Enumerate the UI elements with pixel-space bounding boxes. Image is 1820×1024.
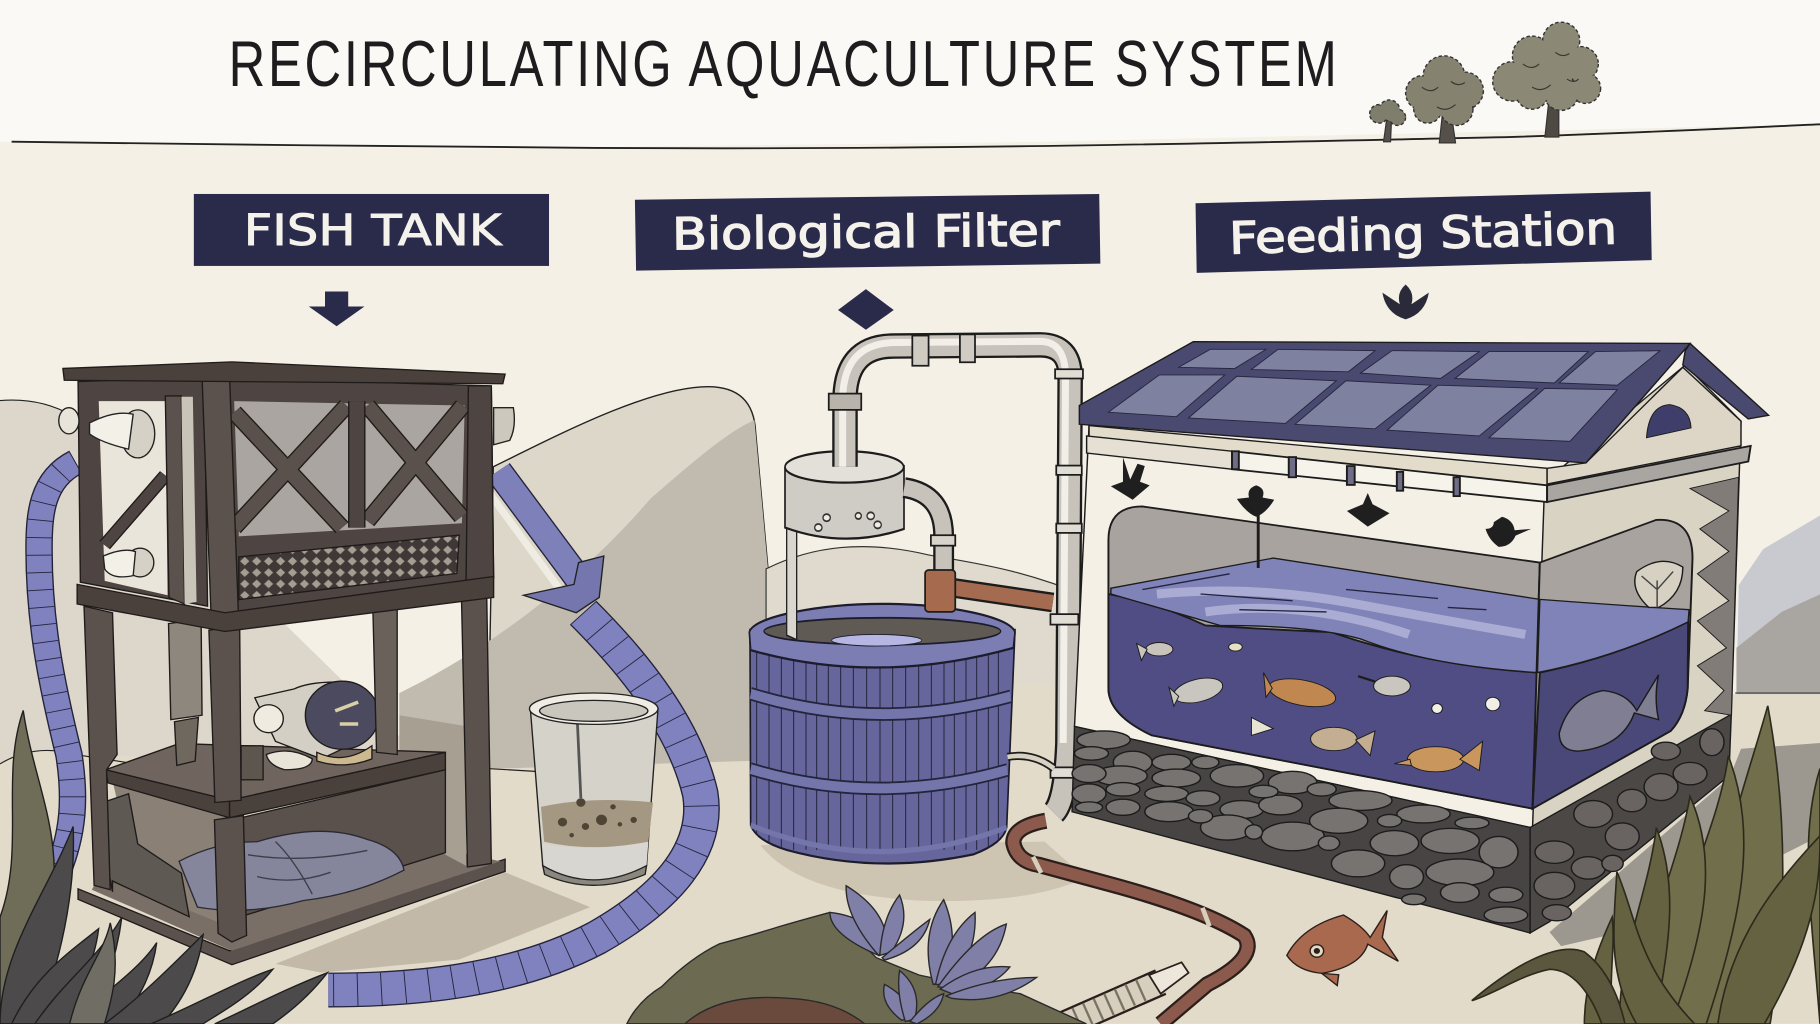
- hose: outflow (right): [328, 471, 701, 990]
- front corner post: [202, 377, 239, 624]
- gable: [1547, 367, 1741, 484]
- pipe: branch: [904, 488, 944, 571]
- label: biological filter: Biological Filter: [672, 205, 1061, 260]
- upper front panel: [204, 377, 494, 619]
- barrel body: [750, 630, 1015, 863]
- shelf: [106, 744, 445, 800]
- pump: [241, 681, 379, 780]
- title: RECIRCULATING AQUACULTURE SYSTEM: [229, 28, 1337, 101]
- chair crate: [96, 794, 189, 917]
- trees illustration: [1370, 22, 1601, 143]
- center pipe: [169, 619, 202, 720]
- fish tank structure with hoses and settling cup: [32, 362, 701, 990]
- top slab: [63, 362, 505, 384]
- wall pipe: [1087, 436, 1232, 469]
- flow arrowhead: [523, 556, 604, 613]
- big fish: [1559, 675, 1659, 751]
- stone foundation: [1072, 714, 1731, 933]
- eave band: [1089, 426, 1547, 485]
- front wall: [1075, 426, 1547, 830]
- lower deck: [78, 859, 505, 965]
- label: fish tank: FISH TANK: [244, 206, 504, 256]
- mid slab: [77, 577, 494, 631]
- arrow: fish tank: [309, 291, 364, 326]
- blanket: [179, 831, 404, 910]
- plant: lower left: [0, 710, 327, 1024]
- label: feeding station: Feeding Station: [1229, 203, 1618, 265]
- label: fish tank: [194, 194, 549, 266]
- feed line: [1255, 513, 1261, 568]
- pipe fittings: [59, 408, 514, 577]
- right wall: [1533, 365, 1741, 827]
- hose nozzle: [1149, 962, 1189, 994]
- hose: return to tank (left): [32, 462, 76, 920]
- coral: [1635, 561, 1683, 607]
- posts: [84, 597, 491, 942]
- solar roof: [1079, 342, 1769, 463]
- shadow under tank: [276, 872, 590, 973]
- tank window: front: [1108, 506, 1540, 809]
- hood legs: [787, 527, 797, 640]
- upper left panel: [78, 377, 208, 606]
- pipe: top return: [843, 341, 1070, 813]
- mesh filter: [239, 535, 459, 600]
- tank window: side: [1533, 520, 1693, 809]
- mound with purple flowers: [627, 886, 1086, 1024]
- label: feeding station: [1196, 192, 1652, 273]
- fish group: [1137, 642, 1500, 772]
- pipe clamps and fittings: [829, 334, 1083, 778]
- barrel bands: [751, 694, 1011, 852]
- drain tube and brown hose: [1008, 756, 1248, 1024]
- cross braces: [234, 401, 463, 528]
- feeding station house: [1072, 342, 1769, 985]
- pipe: copper outlet: [942, 586, 1053, 603]
- plant: lower right: [1472, 706, 1820, 1024]
- dormer vent: [1646, 405, 1691, 438]
- ground fish: [1287, 911, 1398, 985]
- frieze: [1232, 446, 1751, 502]
- arrow: feeding station: [1382, 284, 1429, 319]
- barrel rim: [749, 604, 1015, 668]
- right wall zigzag panel: [1690, 477, 1739, 715]
- hood: [785, 466, 904, 539]
- biological filter barrel and hood: [749, 451, 1015, 863]
- hanging feeder icons: [1111, 457, 1531, 547]
- pipework: [843, 341, 1070, 813]
- water highlights: [1142, 574, 1525, 634]
- back post: [373, 606, 397, 754]
- settling cup: [529, 693, 658, 885]
- arrow: biological filter: [838, 289, 894, 330]
- label: biological filter: [635, 194, 1100, 271]
